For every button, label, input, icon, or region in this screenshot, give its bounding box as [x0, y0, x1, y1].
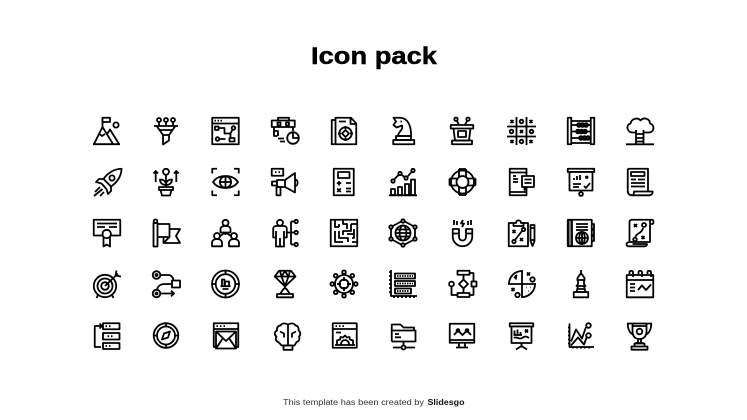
icon: document with target — [332, 118, 356, 144]
icon: tic tac toe — [507, 117, 536, 145]
footer credit: Slidesgo — [428, 398, 465, 407]
icon: network folder — [392, 324, 416, 350]
icon: globe network — [389, 219, 417, 247]
icon: calendar chart — [627, 271, 653, 297]
icon: presentation easel — [510, 323, 533, 350]
icon: eye scan — [212, 169, 239, 195]
icon: person with nodes — [273, 220, 298, 246]
title: Icon pack — [311, 43, 437, 70]
icon: diamond trophy — [275, 271, 296, 297]
icon: bar table — [389, 270, 417, 298]
icon: book with globe — [568, 220, 594, 246]
icon: funnel — [154, 118, 178, 144]
icon: life ring — [450, 169, 476, 195]
icon: calculator — [334, 169, 354, 195]
icon: magnet — [453, 220, 472, 246]
footer credit: This template has been created by — [283, 398, 424, 407]
icon: line and bar chart — [389, 169, 417, 195]
icon: browser with envelope — [214, 323, 238, 348]
icon: quarter pie — [508, 270, 536, 298]
icon: briefcase with pie chart — [272, 118, 299, 144]
icon: team hierarchy — [212, 220, 239, 246]
icon: target with arrow — [94, 270, 121, 298]
icon: ladder to cloud — [626, 118, 654, 144]
icon: rocket — [94, 169, 122, 196]
icon: flag — [154, 219, 180, 246]
icon: maze — [331, 220, 357, 246]
icon: brain bulb — [275, 323, 300, 350]
icon: abacus — [568, 118, 594, 144]
icon: treasure map — [627, 220, 654, 246]
icon: plant with arrows — [154, 169, 179, 196]
icon: monitor with line chart — [450, 324, 474, 348]
icon: trophy — [628, 324, 651, 350]
icon: certificate — [94, 220, 120, 246]
icon: browser flowchart — [212, 118, 239, 144]
icon: phone with chat — [510, 169, 534, 195]
icon: clipboard with pencil — [509, 220, 534, 246]
icon: newspaper scroll — [628, 169, 653, 195]
icon: chess piece — [574, 270, 588, 297]
icon: chess knight — [393, 118, 414, 144]
icon: presentation board — [568, 169, 594, 196]
icon: process flow — [153, 271, 180, 297]
icon: browser with gear — [333, 323, 357, 348]
icon: circular chart — [212, 270, 239, 298]
icon: compass — [153, 322, 179, 348]
icon: server with arrow — [95, 323, 120, 349]
icon: flowchart — [449, 271, 476, 297]
icon: podium with microphones — [451, 118, 473, 144]
icon: megaphone — [272, 169, 298, 195]
icon: scatter line chart — [568, 323, 594, 348]
icon: gear target — [330, 270, 358, 298]
footer credit — [283, 398, 465, 407]
icon: mountain with flag — [93, 118, 120, 144]
